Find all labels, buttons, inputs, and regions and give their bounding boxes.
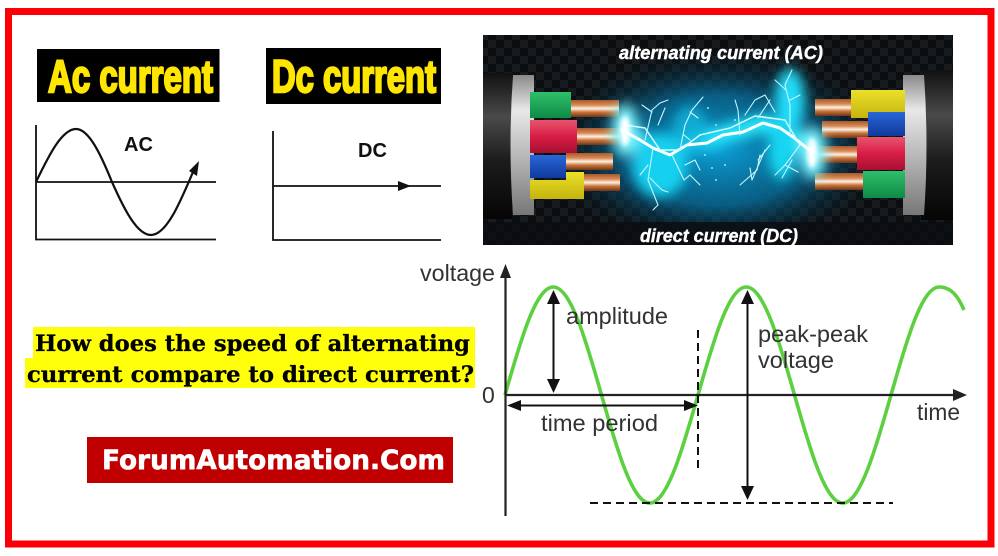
caption: direct current (DC): direct current (DC) [640, 226, 798, 246]
heading: Ac current: Ac current [48, 51, 213, 102]
chart labels: time [917, 399, 960, 425]
logo: ForumAutomation.Com [87, 437, 453, 483]
arrowhead: AC curve [189, 161, 199, 176]
electric arc glow [612, 68, 826, 197]
amplitude arrow [547, 290, 560, 393]
arc contact flashes [620, 116, 817, 168]
label: DC: DC [358, 140, 387, 162]
logo: ForumAutomation.Com: ForumAutomation.Com [102, 445, 445, 476]
chart labels: peak-peak [758, 321, 868, 347]
arrowhead: DC line [398, 181, 411, 191]
time period arrow [507, 400, 698, 411]
axes [500, 264, 967, 516]
peak-peak arrow [741, 290, 754, 500]
chart labels: amplitude [566, 303, 668, 329]
lightning bolts [622, 70, 813, 210]
chart: voltage vs time sine wave [420, 260, 967, 516]
question text with yellow highlight: current compare to direct current? [27, 362, 474, 388]
chart: DC line [273, 131, 441, 240]
photo: cables with electric arc [483, 35, 953, 250]
chart labels: time period [541, 410, 658, 436]
sine curve [505, 287, 964, 503]
chart labels [420, 260, 960, 436]
question text with yellow highlight: How does the speed of alternating [35, 331, 470, 357]
label: AC: AC [124, 134, 153, 156]
chart labels: voltage [420, 260, 495, 286]
heading: Dc current: Dc current [272, 51, 436, 102]
left cable [483, 73, 620, 219]
right cable [815, 70, 953, 220]
caption: alternating current (AC): alternating current (AC) [619, 43, 823, 63]
chart labels: 0 [482, 382, 495, 408]
dashed guides [590, 330, 893, 503]
chart labels: voltage [758, 347, 834, 373]
heading: Dc current [266, 48, 441, 104]
chart: AC waveform [36, 125, 216, 240]
question text with yellow highlight [25, 327, 475, 388]
